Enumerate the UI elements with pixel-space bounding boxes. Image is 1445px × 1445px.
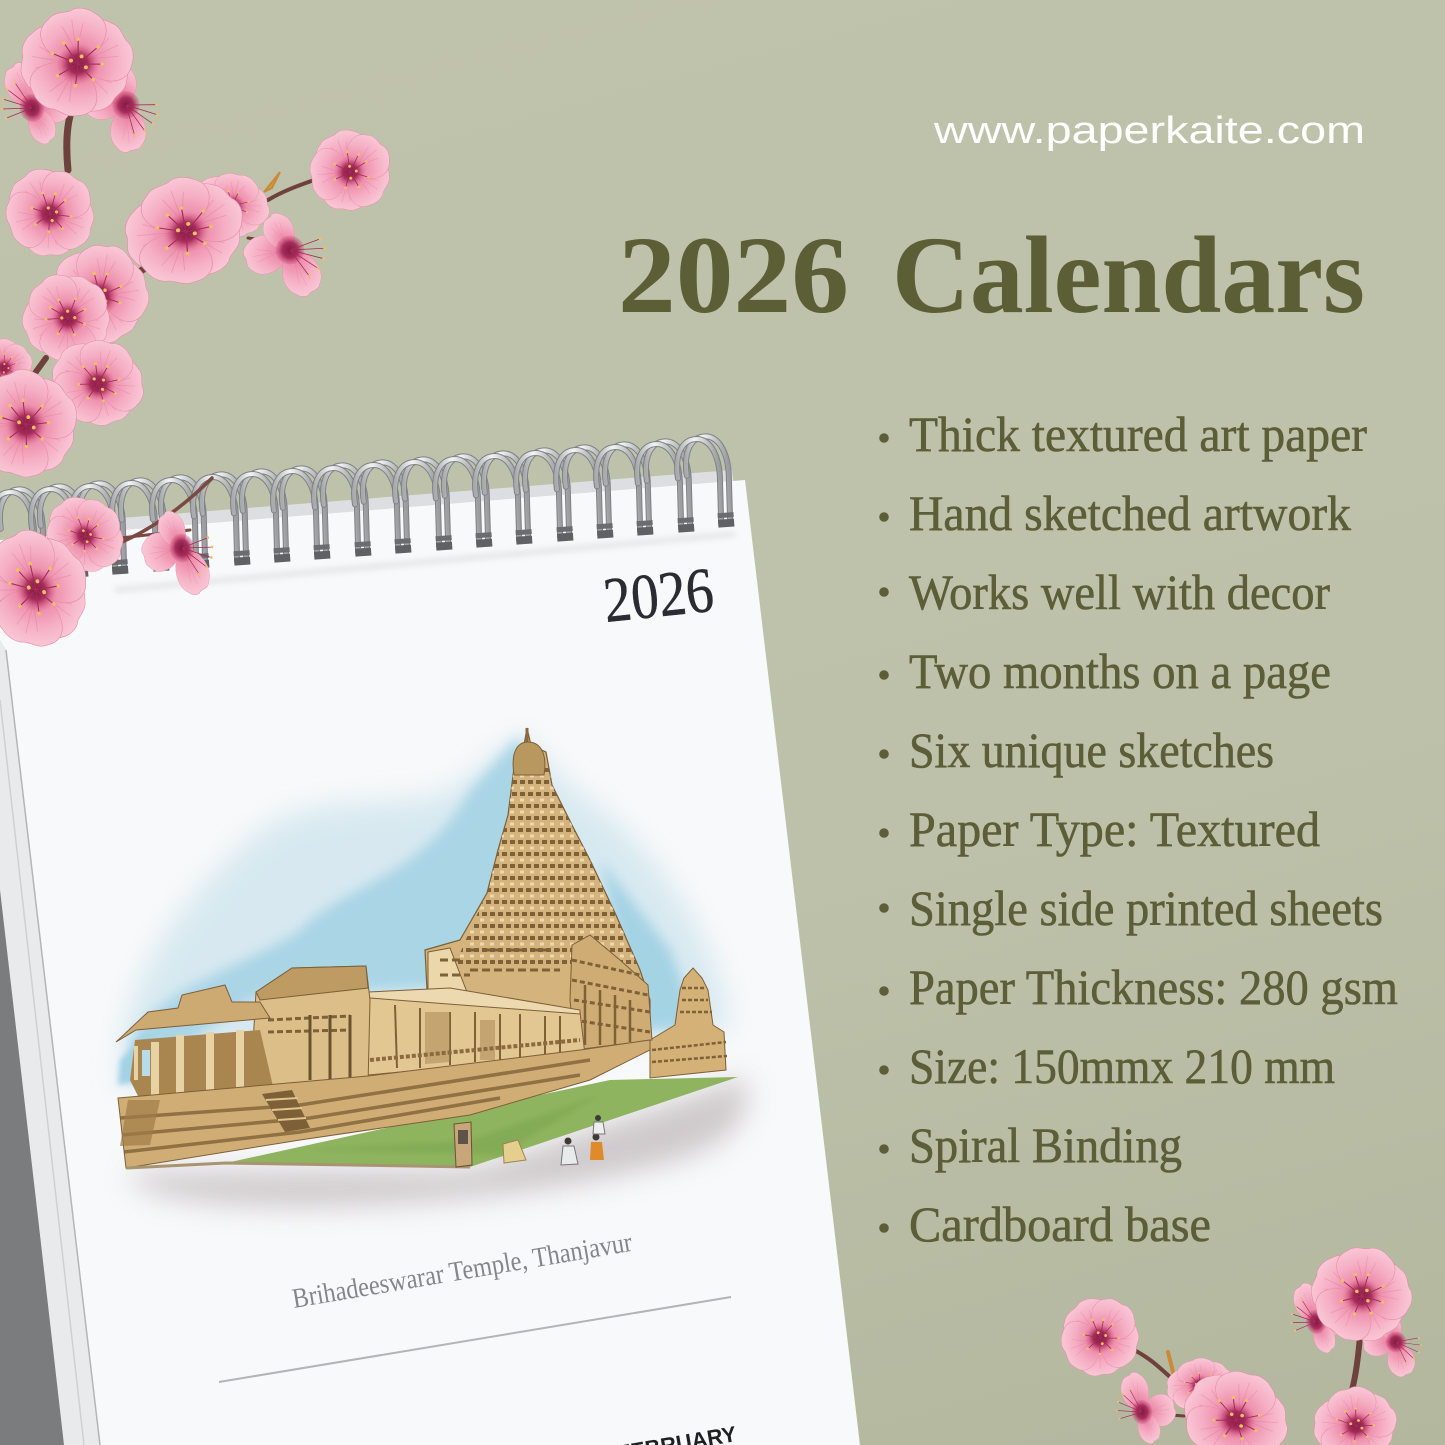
blossom <box>102 158 270 313</box>
calendar page <box>0 480 860 1445</box>
feature list <box>880 406 1398 1252</box>
feature: thickness: Paper Thickness: 280 gsm <box>909 959 1398 1015</box>
pavement edge <box>126 1163 470 1168</box>
blossom <box>1159 1353 1308 1445</box>
blossom <box>74 57 167 161</box>
blossom <box>180 163 282 253</box>
feature: months: Two months on a page <box>909 643 1331 699</box>
feature: single side: Single side printed sheets <box>909 880 1383 936</box>
feature: binding: Spiral Binding <box>909 1117 1182 1173</box>
blossom <box>0 51 79 154</box>
plaque and stone <box>454 1122 526 1167</box>
blossom <box>0 325 45 412</box>
grey binding strip <box>120 470 734 534</box>
desk shadow <box>0 880 66 1445</box>
ring shadows <box>115 534 735 590</box>
page stack edge <box>0 640 100 1445</box>
small shrine <box>650 968 727 1078</box>
grass lawn <box>226 1077 738 1167</box>
temple plinth <box>118 1040 650 1168</box>
feature: paper type: Paper Type: Textured <box>909 801 1320 857</box>
spiral binding <box>0 435 734 579</box>
temple illustration <box>116 728 747 1207</box>
blossom <box>237 202 334 309</box>
blossom <box>0 253 138 389</box>
blossom <box>1036 1278 1160 1401</box>
title year: 2026 <box>618 214 849 336</box>
blossom <box>1156 1350 1243 1424</box>
watercolour sky <box>118 735 730 1090</box>
blossom <box>0 145 118 286</box>
blossom <box>0 356 99 501</box>
website url: www.paperkaite.com <box>933 110 1365 152</box>
blossom <box>0 513 115 675</box>
blossom <box>22 477 144 598</box>
feature: sketches: Six unique sketches <box>909 722 1274 778</box>
title word: Calendars <box>892 214 1365 336</box>
front portico <box>116 985 275 1100</box>
caption: Brihadeeswarar Temple, Thanjavur <box>290 1227 635 1315</box>
blossom <box>1284 1274 1354 1361</box>
feature: paper: Thick textured art paper <box>909 406 1367 462</box>
cherry blossom sprig over calendar <box>0 477 222 675</box>
mandapa block <box>250 966 370 1095</box>
temple tower <box>425 728 650 1040</box>
sprig stems <box>80 478 212 572</box>
seated visitors <box>561 1115 605 1165</box>
blossom <box>34 235 163 363</box>
feature: artwork: Hand sketched artwork <box>909 485 1351 541</box>
desk calendar <box>0 435 860 1445</box>
cherry blossom branch: bottom right <box>1036 1239 1425 1445</box>
blossom <box>1301 1380 1410 1445</box>
feature: decor: Works well with decor <box>909 564 1330 620</box>
tower front block <box>570 935 652 1050</box>
branch stems <box>1134 1336 1360 1416</box>
cherry blossom branch: top left <box>0 0 412 501</box>
blossom <box>135 501 222 606</box>
blossom <box>1112 1366 1179 1445</box>
blossom <box>5 0 149 135</box>
blossom <box>1296 1239 1425 1358</box>
long hall wall <box>368 988 585 1075</box>
caption rule <box>219 1297 731 1382</box>
year on page: 2026 <box>600 554 717 636</box>
branch stems <box>30 110 320 380</box>
feature: size: Size: 150mmx 210 mm <box>909 1038 1335 1094</box>
blossom <box>1362 1311 1422 1380</box>
blossom <box>283 108 412 238</box>
blossom <box>30 324 162 448</box>
title <box>618 214 1365 336</box>
feature: base: Cardboard base <box>909 1196 1211 1252</box>
ground wash <box>130 1078 747 1207</box>
